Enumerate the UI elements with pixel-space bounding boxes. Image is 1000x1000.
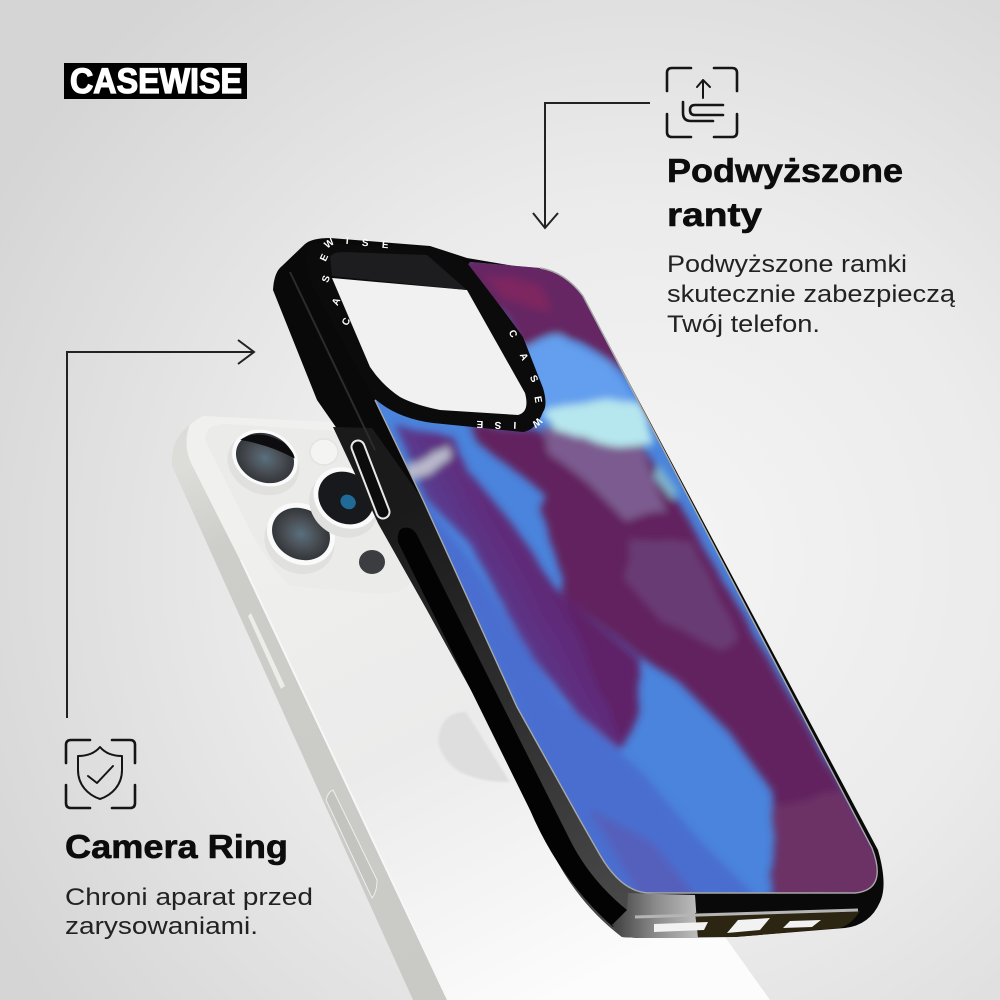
heading: camera ring: Camera Ring [65,828,288,865]
ring lettering: C [506,328,519,340]
bottom violet patch [592,812,694,892]
ring lettering: W [529,415,544,430]
flash [310,439,338,465]
ring lettering: E [318,252,331,263]
lidar sensor [359,550,385,574]
camera ring [307,236,546,432]
ring lettering: C [340,316,353,328]
heading: raised edges: ranty [667,196,763,233]
big purple body [470,425,890,900]
lens bottom [252,491,349,586]
lower-left violet tone [424,501,754,892]
arrow: left [67,340,254,718]
camera opening [332,278,526,415]
ring lettering: W [323,236,337,251]
screen edge highlight [375,268,877,893]
icon: raised edges [667,68,737,137]
text: raised edges [667,251,956,338]
side slot [398,528,627,927]
camera island [205,424,412,594]
upper sky [520,335,650,420]
case bottom olive lip [695,911,860,937]
text: camera ring [65,884,313,940]
purple arm [395,425,640,750]
heading: raised edges: Podwyższone [667,152,903,189]
body pale mauve upper [540,425,665,520]
ring lettering: E [531,395,544,404]
red streak [486,275,551,312]
side button lower [326,790,377,898]
arm dark tip [574,615,636,744]
side gloss line [290,272,375,450]
body mid mauve [625,540,740,650]
lens right [296,455,394,551]
painted artwork on case [360,250,890,900]
port holes [654,918,821,933]
phone back [172,416,770,1000]
icon: shield [66,740,135,808]
ring lettering: S [494,419,501,430]
horn [402,444,452,486]
lens top [217,418,311,507]
ring lettering: I [513,419,516,430]
case body [273,238,884,938]
ring lettering: S [361,238,369,249]
ring lettering: S [320,274,333,284]
case lower side panel [333,427,650,938]
ring lettering: A [330,296,343,308]
band inner highlight [241,560,448,1000]
text: camera ring: zarysowaniami. [65,913,258,940]
volume button pill [358,447,383,512]
artwork base blue [360,250,890,900]
black case [273,238,884,938]
text: camera ring: Chroni aparat przed [65,884,313,911]
cloud highlight [545,400,655,450]
case bottom grey translucent part [612,893,698,938]
white phone [172,416,770,1000]
ring frame [307,243,546,432]
ring lettering: A [517,351,530,363]
arrow: top [533,103,650,228]
right cloud wisp [657,465,676,500]
ring lettering: E [476,418,483,429]
phone side band [172,424,447,1000]
side button upper [248,613,285,689]
body lower tone [775,790,880,900]
ring lettering [318,236,544,430]
text: raised edges: skutecznie zabezpieczą [667,281,956,308]
logo: CASEWISE [70,62,242,101]
heading: raised edges [667,152,903,233]
ring lettering: I [345,236,349,247]
ring lettering: E [381,240,389,251]
inner wall [330,252,467,290]
apple logo [438,712,510,782]
purple top [468,262,626,381]
case bottom highlight line [635,910,858,917]
text: raised edges: Podwyższone ramki [667,251,907,278]
ring lettering: S [527,374,540,385]
text: raised edges: Twój telefon. [667,311,820,338]
